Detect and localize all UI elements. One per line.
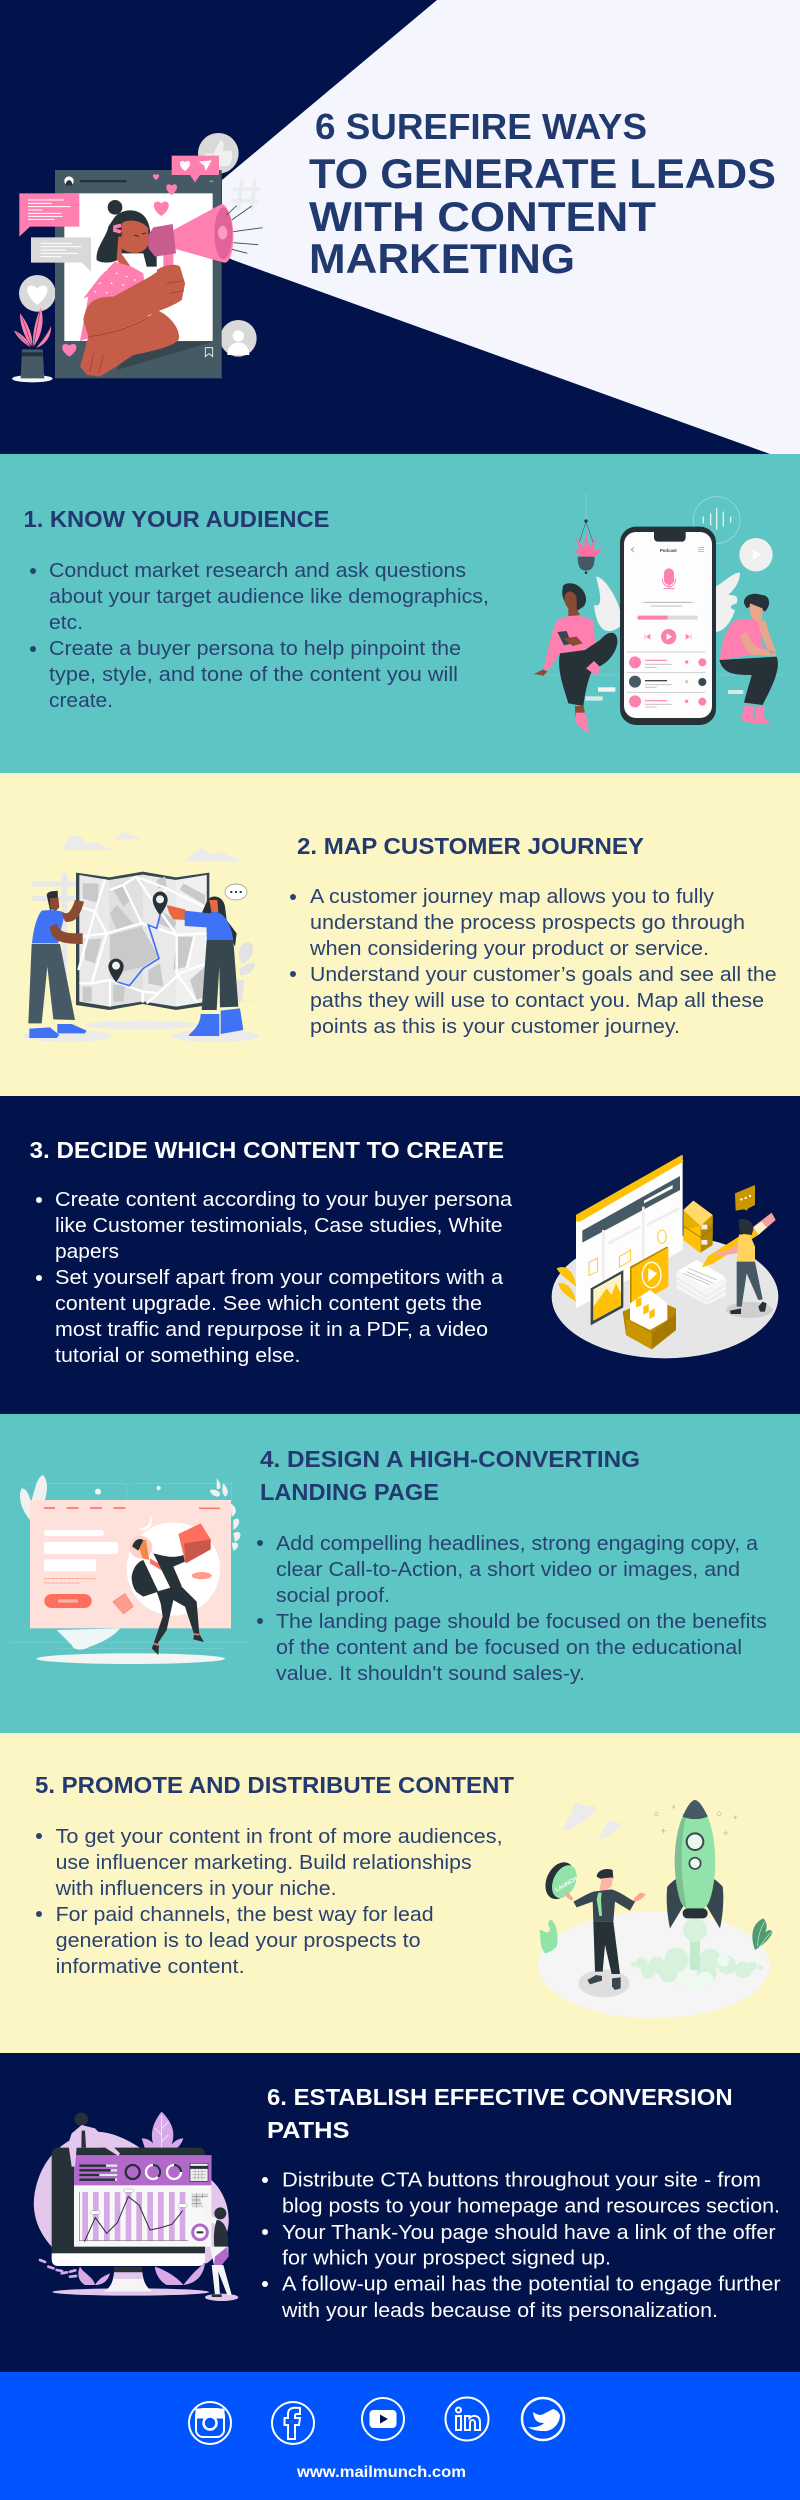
pink like callout <box>172 156 219 182</box>
panel: 5. promote and distribute content <box>0 1733 800 2054</box>
bullets 6: Your Thank-You page should have a link of the offer <box>282 2222 776 2244</box>
bullets 6: with your leads because of its personalization. <box>281 2300 718 2322</box>
video tile <box>632 1247 668 1308</box>
woman left <box>562 583 586 610</box>
bullets 3 <box>36 1189 513 1367</box>
man right <box>744 594 769 612</box>
bullets 2: points as this is your customer journey. <box>310 1016 680 1038</box>
rocket <box>667 1878 723 1928</box>
bullets 2: A customer journey map allows you to fully <box>310 886 714 908</box>
man <box>47 891 58 910</box>
bullets 5 <box>36 1826 503 1978</box>
icon: twitter <box>522 2398 564 2440</box>
bullets 6: for which your prospect signed up. <box>282 2248 611 2270</box>
illustration: podcast phone with two people <box>534 493 787 734</box>
bullets 4: Add compelling headlines, strong engaging copy, a <box>276 1533 759 1555</box>
bullets 3: Set yourself apart from your competitors with a <box>55 1267 504 1289</box>
bullets 3: papers <box>55 1241 119 1263</box>
icon: facebook <box>272 2402 314 2444</box>
megaphone <box>163 253 173 267</box>
illustration: two people reading a map <box>23 832 259 1042</box>
left bubbles <box>19 193 79 237</box>
bullets 5: To get your content in front of more audiences, <box>56 1826 503 1848</box>
icon: youtube <box>362 2398 404 2440</box>
route <box>117 915 160 986</box>
panel: 3. decide which content to create <box>0 1096 800 1414</box>
bullets 1: type, style, and tone of the content you will <box>49 664 458 686</box>
browser window <box>576 1155 683 1308</box>
heading 4 <box>260 1446 640 1505</box>
bullets 3: content upgrade. See which content gets the <box>55 1293 482 1315</box>
bullets 1 <box>30 560 489 712</box>
bullets 3: Create content according to your buyer persona <box>55 1189 513 1211</box>
man on top <box>75 2113 88 2126</box>
girl <box>108 200 122 215</box>
chat bubble <box>735 1185 755 1211</box>
man <box>597 1869 613 1880</box>
title: 6 SUREFIRE WAYS <box>315 106 647 147</box>
heading 4: LANDING PAGE <box>260 1479 439 1505</box>
heading 4: 4. DESIGN A HIGH-CONVERTING <box>260 1446 640 1472</box>
smoke <box>631 1948 763 1983</box>
woman at right <box>205 2294 238 2301</box>
title <box>309 106 776 282</box>
bullets 5: For paid channels, the best way for lead <box>56 1904 434 1926</box>
bullets 1: Conduct market research and ask questions <box>49 560 466 582</box>
map pins <box>153 891 168 915</box>
title: TO GENERATE LEADS <box>309 150 776 197</box>
illustration: girl with megaphone in social post <box>12 133 263 382</box>
exhaust <box>690 1933 700 1970</box>
illustration: rocket launch <box>538 1800 772 2018</box>
hand and bookmark <box>157 265 185 307</box>
icon: linkedin <box>446 2398 488 2440</box>
bullets 6: Distribute CTA buttons throughout your site - from <box>282 2170 761 2192</box>
heading 2: 2. MAP CUSTOMER JOURNEY <box>297 833 644 859</box>
illustration: rocket launch: LAUNCH <box>555 1876 578 1893</box>
photo tile <box>591 1270 623 1325</box>
box <box>623 1298 676 1349</box>
illustration: podcast phone with two people: Podcast <box>660 548 677 553</box>
drawers <box>683 1201 713 1248</box>
plants <box>539 1920 558 1953</box>
illustration: landing page with floating man <box>10 1475 252 1664</box>
panel: footer <box>0 2372 800 2500</box>
illustration: analytics dashboard on monitor <box>34 2112 238 2301</box>
title: WITH CONTENT <box>309 193 656 240</box>
heading 6: 6. ESTABLISH EFFECTIVE CONVERSION <box>267 2084 733 2110</box>
bullets 2: paths they will use to contact you. Map all these <box>310 990 764 1012</box>
bullets 1: about your target audience like demographics, <box>49 586 489 608</box>
bullets 2: when considering your product or service. <box>309 938 709 960</box>
bullets 1: create. <box>49 690 113 712</box>
bullets 4: social proof. <box>276 1585 390 1607</box>
heading 5: 5. PROMOTE AND DISTRIBUTE CONTENT <box>35 1772 514 1798</box>
bullets 4: The landing page should be focused on the benefits <box>276 1611 767 1633</box>
title: MARKETING <box>309 235 575 282</box>
businessman <box>130 1536 152 1559</box>
bullets 2: understand the process prospects go through <box>310 912 745 934</box>
woman with pencil <box>726 1302 773 1318</box>
monitor <box>52 2148 205 2253</box>
bullets 3: tutorial or something else. <box>55 1345 300 1367</box>
bullets 6 <box>262 2170 781 2322</box>
map <box>76 872 209 1010</box>
panel: 2. map customer journey <box>0 773 800 1096</box>
bullets 1: etc. <box>49 612 83 634</box>
bullets 5: use influencer marketing. Build relationships <box>56 1852 472 1874</box>
panel: hero header <box>0 0 800 455</box>
website url: www.mailmunch.com <box>296 2464 466 2481</box>
bullets 3: most traffic and repurpose it in a PDF, a video <box>55 1319 488 1341</box>
bullets 6: A follow-up email has the potential to engage further <box>282 2274 781 2296</box>
bullets 4 <box>257 1533 767 1685</box>
bullets 4: of the content and be focused on the educational <box>276 1637 742 1659</box>
woman <box>202 896 237 947</box>
bullets 5: informative content. <box>56 1956 245 1978</box>
phone <box>620 527 716 725</box>
heading 6 <box>267 2084 733 2143</box>
heading 3: 3. DECIDE WHICH CONTENT TO CREATE <box>30 1137 504 1163</box>
panel: 6. establish effective conversion paths <box>0 2053 800 2372</box>
plant <box>14 307 51 348</box>
icon: instagram <box>189 2402 231 2444</box>
launch button <box>540 1858 580 1904</box>
paper stack <box>677 1260 726 1305</box>
heading 1: 1. KNOW YOUR AUDIENCE <box>24 506 330 532</box>
bullets 5: with influencers in your niche. <box>55 1878 337 1900</box>
bullets 3: like Customer testimonials, Case studies, White <box>55 1215 502 1237</box>
bullets 2: Understand your customer’s goals and see all the <box>310 964 776 986</box>
bullets 5: generation is to lead your prospects to <box>56 1930 421 1952</box>
panel: 4. design a high-converting landing page <box>0 1414 800 1733</box>
heading 6: PATHS <box>267 2117 350 2143</box>
illustration: content creation isometric scene <box>552 1155 778 1358</box>
panel: 1. know your audience <box>0 454 800 773</box>
bullets 4: clear Call-to-Action, a short video or images, and <box>276 1559 740 1581</box>
bullets 2 <box>290 886 776 1038</box>
bullets 6: blog posts to your homepage and resources section. <box>282 2196 780 2218</box>
bullets 4: value. It shouldn't sound sales-y. <box>276 1663 585 1685</box>
bullets 1: Create a buyer persona to help pinpoint the <box>49 638 461 660</box>
